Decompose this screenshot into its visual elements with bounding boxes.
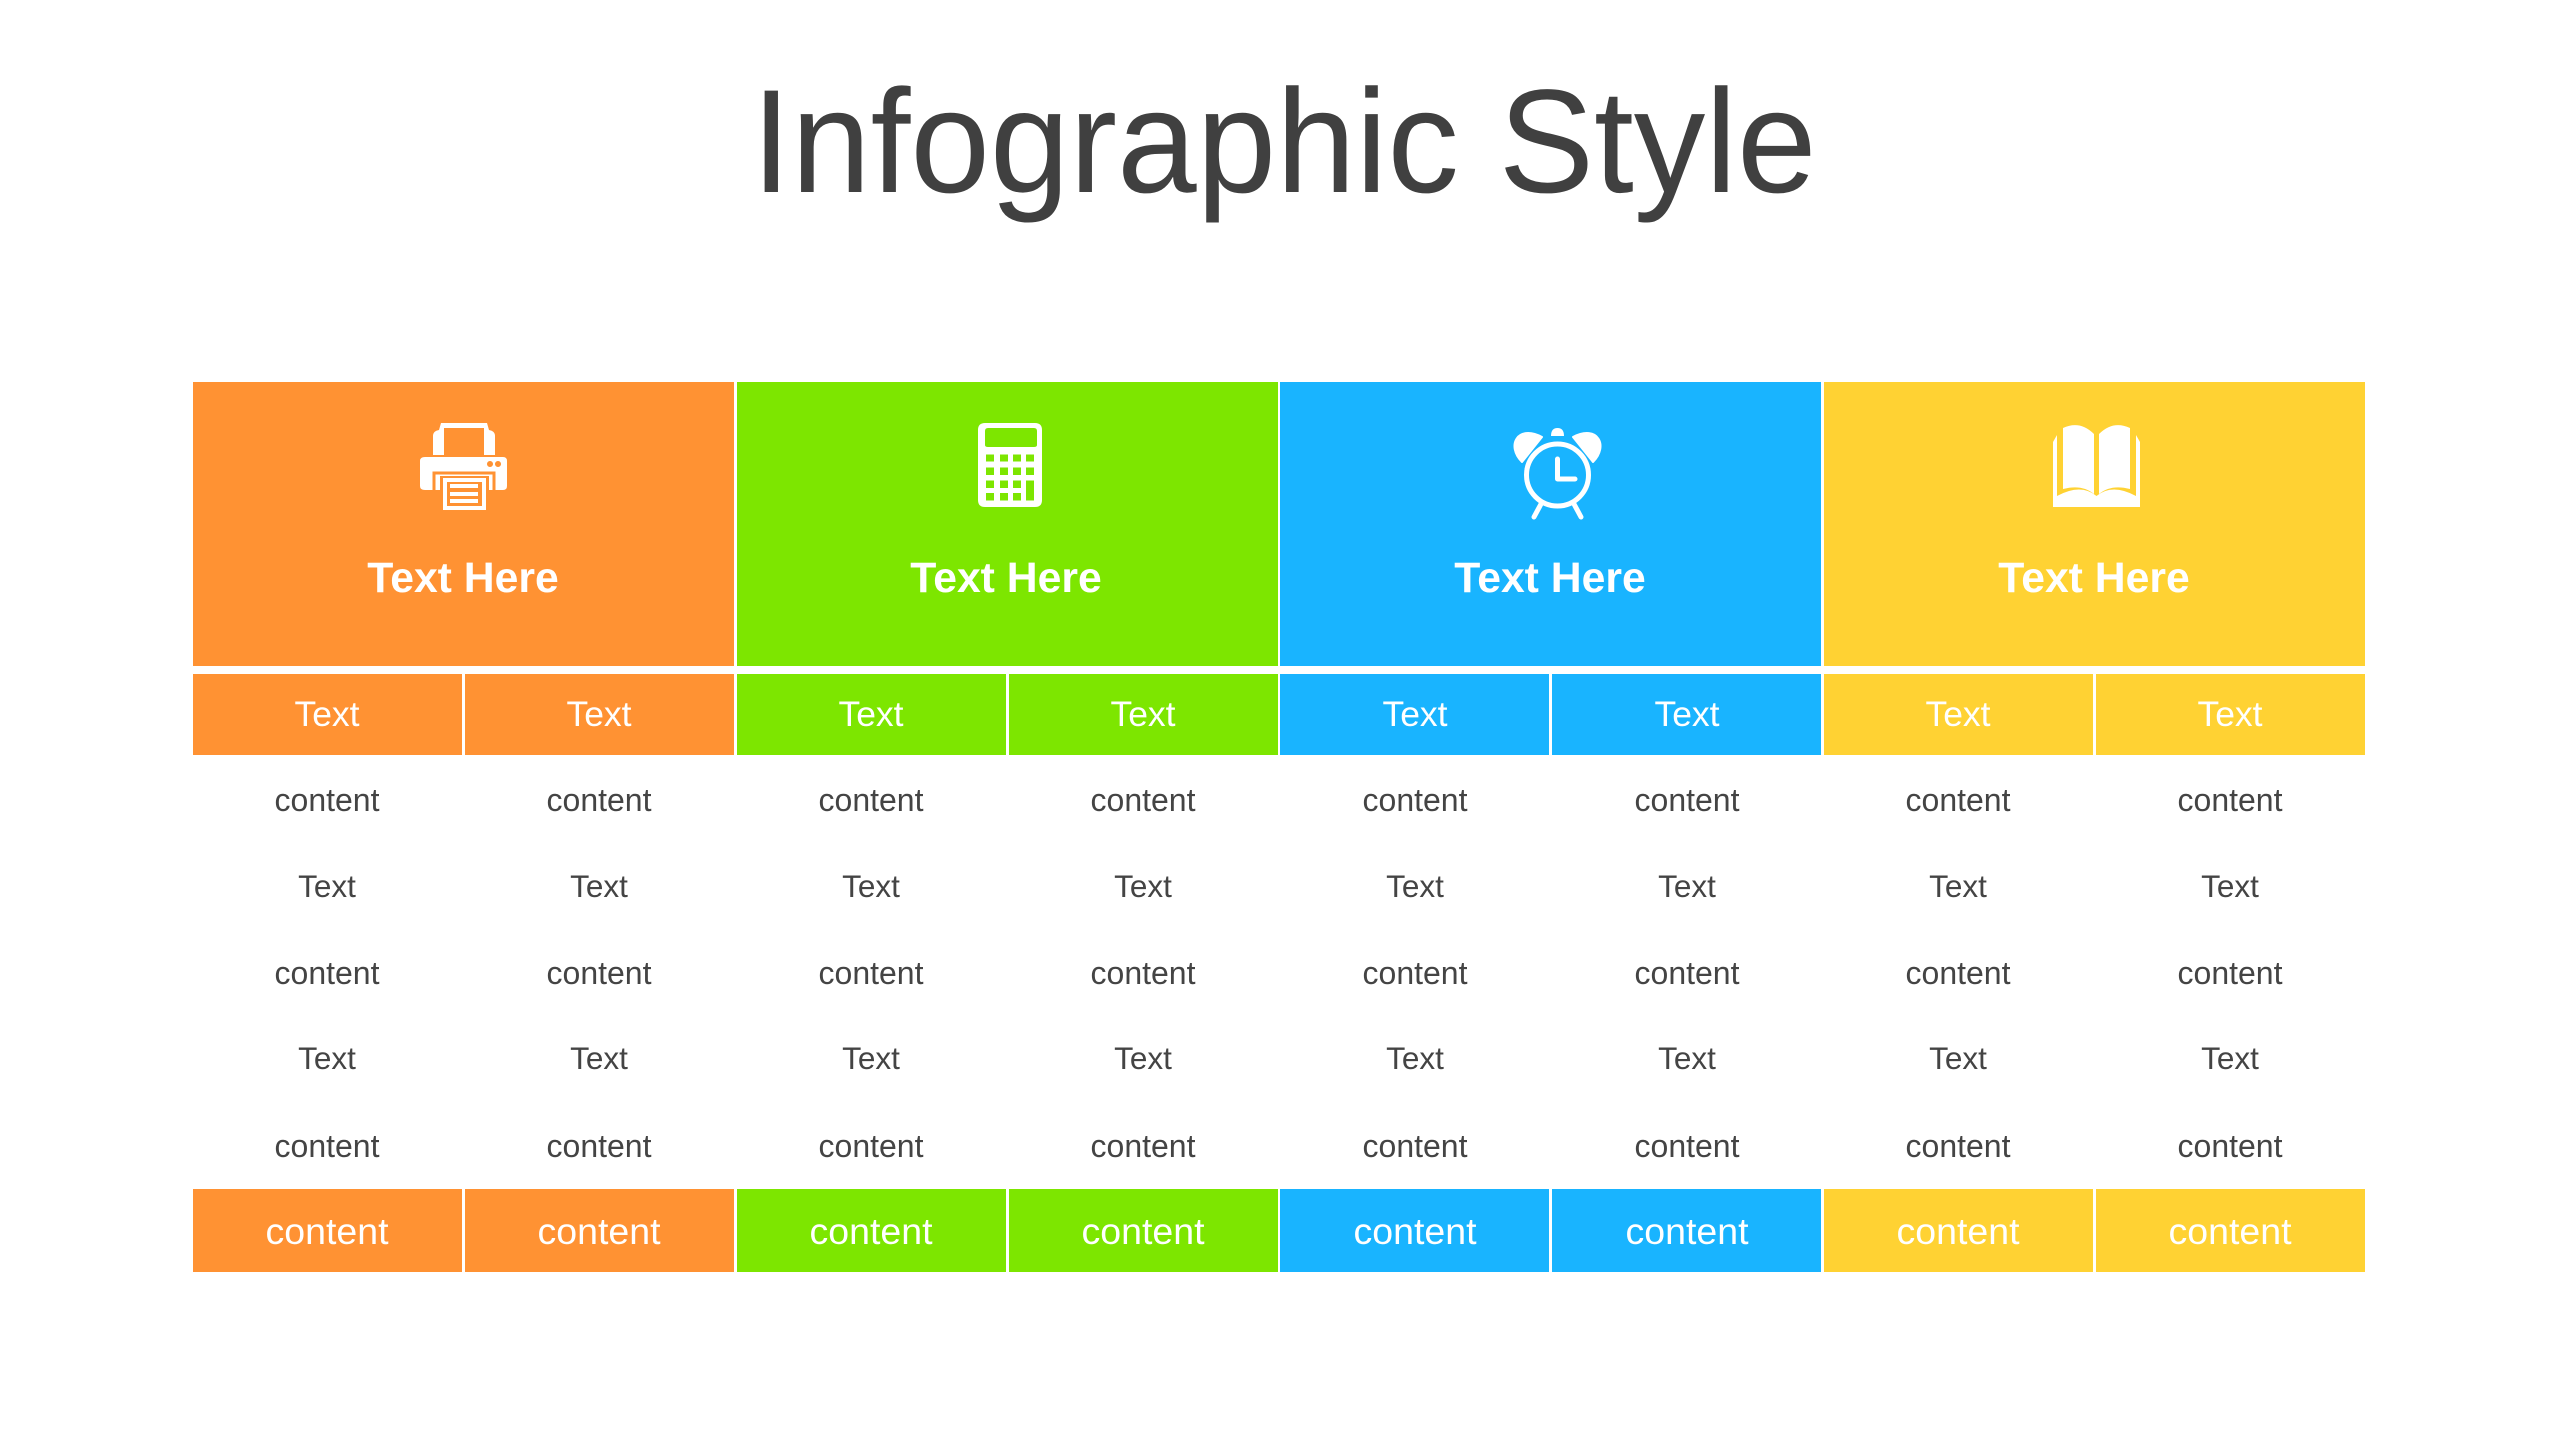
orange footer cells: content [265,1210,389,1252]
title: Infographic Style [751,59,1817,223]
blue body rows: content [1363,955,1468,991]
panel: yellow column [1824,382,2365,1272]
green sub-header cells: Text [838,694,904,734]
blue sub-header cells: Text [1382,694,1448,734]
yellow body rows: Text [1929,868,1987,904]
blue body rows [1363,782,1740,1164]
blue sub-header cells: Text [1654,694,1720,734]
blue header block [1280,382,1821,666]
panel: orange column [193,382,734,1272]
yellow sub-header cells [1824,674,2365,755]
green header block [737,382,1278,666]
yellow body rows: Text [2201,868,2259,904]
yellow header label: Text Here [1998,554,2190,602]
blue body rows: Text [1386,1040,1444,1076]
green body rows: content [1091,955,1196,991]
orange body rows: Text [570,868,628,904]
blue body rows: Text [1386,868,1444,904]
orange header block [193,382,734,666]
yellow sub-header cells: Text [1925,694,1991,734]
yellow body rows: content [1906,955,2011,991]
orange body rows: Text [570,1040,628,1076]
yellow footer cells: content [1896,1210,2020,1252]
yellow body rows: content [1906,782,2011,818]
orange footer cells [193,1189,734,1272]
icon: open book [2053,425,2140,507]
blue footer cells [1280,1189,1821,1272]
yellow body rows: content [2178,782,2283,818]
yellow body rows: content [2178,1128,2283,1164]
icon: calculator [978,423,1042,507]
green header label: Text Here [910,554,1102,602]
blue body rows: content [1363,1128,1468,1164]
blue footer cells: content [1353,1210,1477,1252]
blue body rows: content [1635,955,1740,991]
green sub-header cells [737,674,1278,755]
green body rows: Text [1114,868,1172,904]
green body rows: content [1091,1128,1196,1164]
blue header label: Text Here [1454,554,1646,602]
icon: alarm clock [1515,428,1600,517]
yellow body rows [1906,782,2283,1164]
yellow body rows: Text [2201,1040,2259,1076]
yellow sub-header cells: Text [2197,694,2263,734]
orange sub-header cells [193,674,734,755]
orange sub-header cells: Text [566,694,632,734]
orange body rows [275,782,652,1164]
orange body rows: content [547,782,652,818]
orange header label: Text Here [367,554,559,602]
yellow body rows: content [2178,955,2283,991]
green footer cells [737,1189,1278,1272]
blue body rows: content [1635,782,1740,818]
blue body rows: Text [1658,868,1716,904]
green body rows: Text [1114,1040,1172,1076]
orange body rows: content [275,782,380,818]
yellow footer cells: content [2168,1210,2292,1252]
green body rows [819,782,1196,1164]
green body rows: content [819,955,924,991]
green sub-header cells: Text [1110,694,1176,734]
blue footer cells: content [1625,1210,1749,1252]
green body rows: content [1091,782,1196,818]
green body rows: content [819,782,924,818]
orange sub-header cells: Text [294,694,360,734]
orange body rows: content [275,955,380,991]
panel: blue column [1280,382,1821,1272]
blue sub-header cells [1280,674,1821,755]
green footer cells: content [1081,1210,1205,1252]
orange footer cells: content [537,1210,661,1252]
icon: printer [420,423,507,512]
orange body rows: Text [298,1040,356,1076]
orange body rows: content [547,955,652,991]
green footer cells: content [809,1210,933,1252]
blue body rows: content [1363,782,1468,818]
blue body rows: content [1635,1128,1740,1164]
yellow footer cells [1824,1189,2365,1272]
yellow body rows: content [1906,1128,2011,1164]
panel: green column [737,382,1278,1272]
orange body rows: content [275,1128,380,1164]
yellow header block [1824,382,2365,666]
green body rows: content [819,1128,924,1164]
orange body rows: content [547,1128,652,1164]
green body rows: Text [842,1040,900,1076]
green body rows: Text [842,868,900,904]
blue body rows: Text [1658,1040,1716,1076]
orange body rows: Text [298,868,356,904]
yellow body rows: Text [1929,1040,1987,1076]
